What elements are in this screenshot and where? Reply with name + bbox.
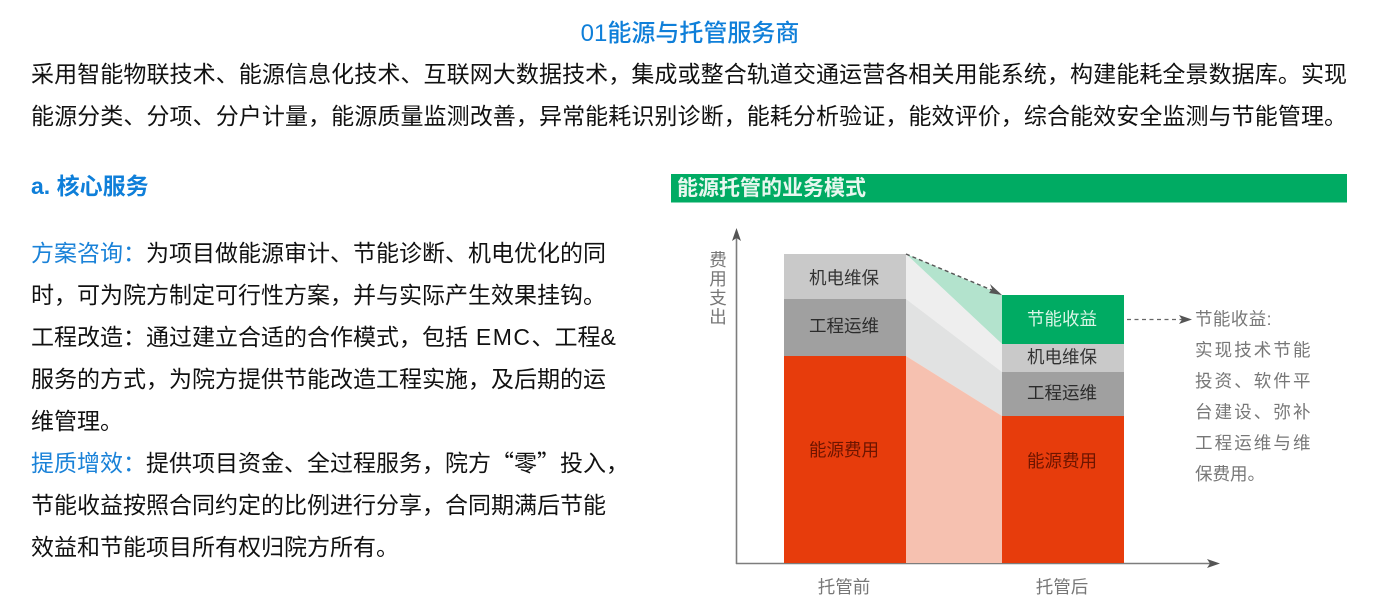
callout: saving benefit note: 实现技术节能 — [1195, 340, 1313, 360]
x axis labels: 托管前 — [818, 577, 870, 597]
service: consulting: 方案咨询：为项目做能源审计、节能诊断、机电优化的同 — [31, 240, 606, 266]
title: 01能源与托管服务商 — [581, 20, 799, 47]
callout: saving benefit note: 保费用。 — [1195, 464, 1265, 484]
service: quality: 提质增效：提供项目资金、全过程服务，院方“零”投入， — [31, 444, 629, 478]
core services text: 效益和节能项目所有权归院方所有。 — [31, 534, 399, 560]
heading: core services: a. 核心服务 — [31, 173, 149, 199]
axis label: cost: 用 — [709, 269, 727, 289]
x axis labels — [818, 577, 1088, 597]
callout: saving benefit note: 台建设、弥补 — [1195, 402, 1313, 422]
intro paragraph: 能源分类、分项、分户计量，能源质量监测改善，异常能耗识别诊断，能耗分析验证，能效评价，综合能效安全监测与节能管理。 — [31, 103, 1347, 129]
bar: after hosting: 节能收益 — [1027, 309, 1097, 329]
callout: saving benefit note — [1195, 309, 1313, 484]
axis: y — [732, 228, 741, 564]
core services text: 服务的方式，为院方提供节能改造工程实施，及后期的运 — [31, 366, 606, 392]
core services text: 维管理。 — [31, 408, 123, 434]
callout: saving benefit note: 节能收益: — [1195, 309, 1272, 329]
callout: saving benefit note: 工程运维与维 — [1195, 433, 1313, 453]
bar: after hosting: 机电维保 — [1027, 347, 1097, 367]
core services text: 时，可为院方制定可行性方案，并与实际产生效果挂钩。 — [31, 282, 606, 308]
axis label: cost: 费 — [709, 250, 727, 270]
arrow: to saving note — [1127, 315, 1192, 324]
chart header: 能源托管的业务模式 — [677, 177, 866, 200]
callout: saving benefit note: 投资、软件平 — [1195, 371, 1313, 391]
bar: before hosting: 机电维保 — [809, 268, 879, 288]
bar: before hosting: 工程运维 — [809, 316, 879, 336]
bar: after hosting — [1002, 295, 1124, 563]
bar: before hosting — [784, 254, 906, 563]
arrow: saving trend — [906, 254, 1002, 295]
axis label: cost: 出 — [709, 307, 727, 327]
axis label: cost: 支 — [709, 288, 727, 308]
core services text — [31, 240, 629, 560]
bar: after hosting: 能源费用 — [1027, 451, 1097, 471]
x axis labels: 托管后 — [1036, 577, 1088, 597]
axis: x — [736, 559, 1220, 568]
transition wedges — [906, 254, 1002, 563]
service: retrofit: 工程改造：通过建立合适的合作模式，包括 EMC、工程& — [31, 324, 616, 350]
chart header — [671, 174, 1347, 202]
core services text: 节能收益按照合同约定的比例进行分享，合同期满后节能 — [31, 492, 606, 518]
bar: after hosting: 工程运维 — [1027, 383, 1097, 403]
axis label: cost — [709, 250, 727, 327]
intro paragraph: 采用智能物联技术、能源信息化技术、互联网大数据技术，集成或整合轨道交通运营各相关用能系统，构建能耗全景数据库。实现 — [31, 61, 1347, 87]
intro paragraph — [31, 61, 1347, 129]
bar: before hosting: 能源费用 — [809, 440, 879, 460]
